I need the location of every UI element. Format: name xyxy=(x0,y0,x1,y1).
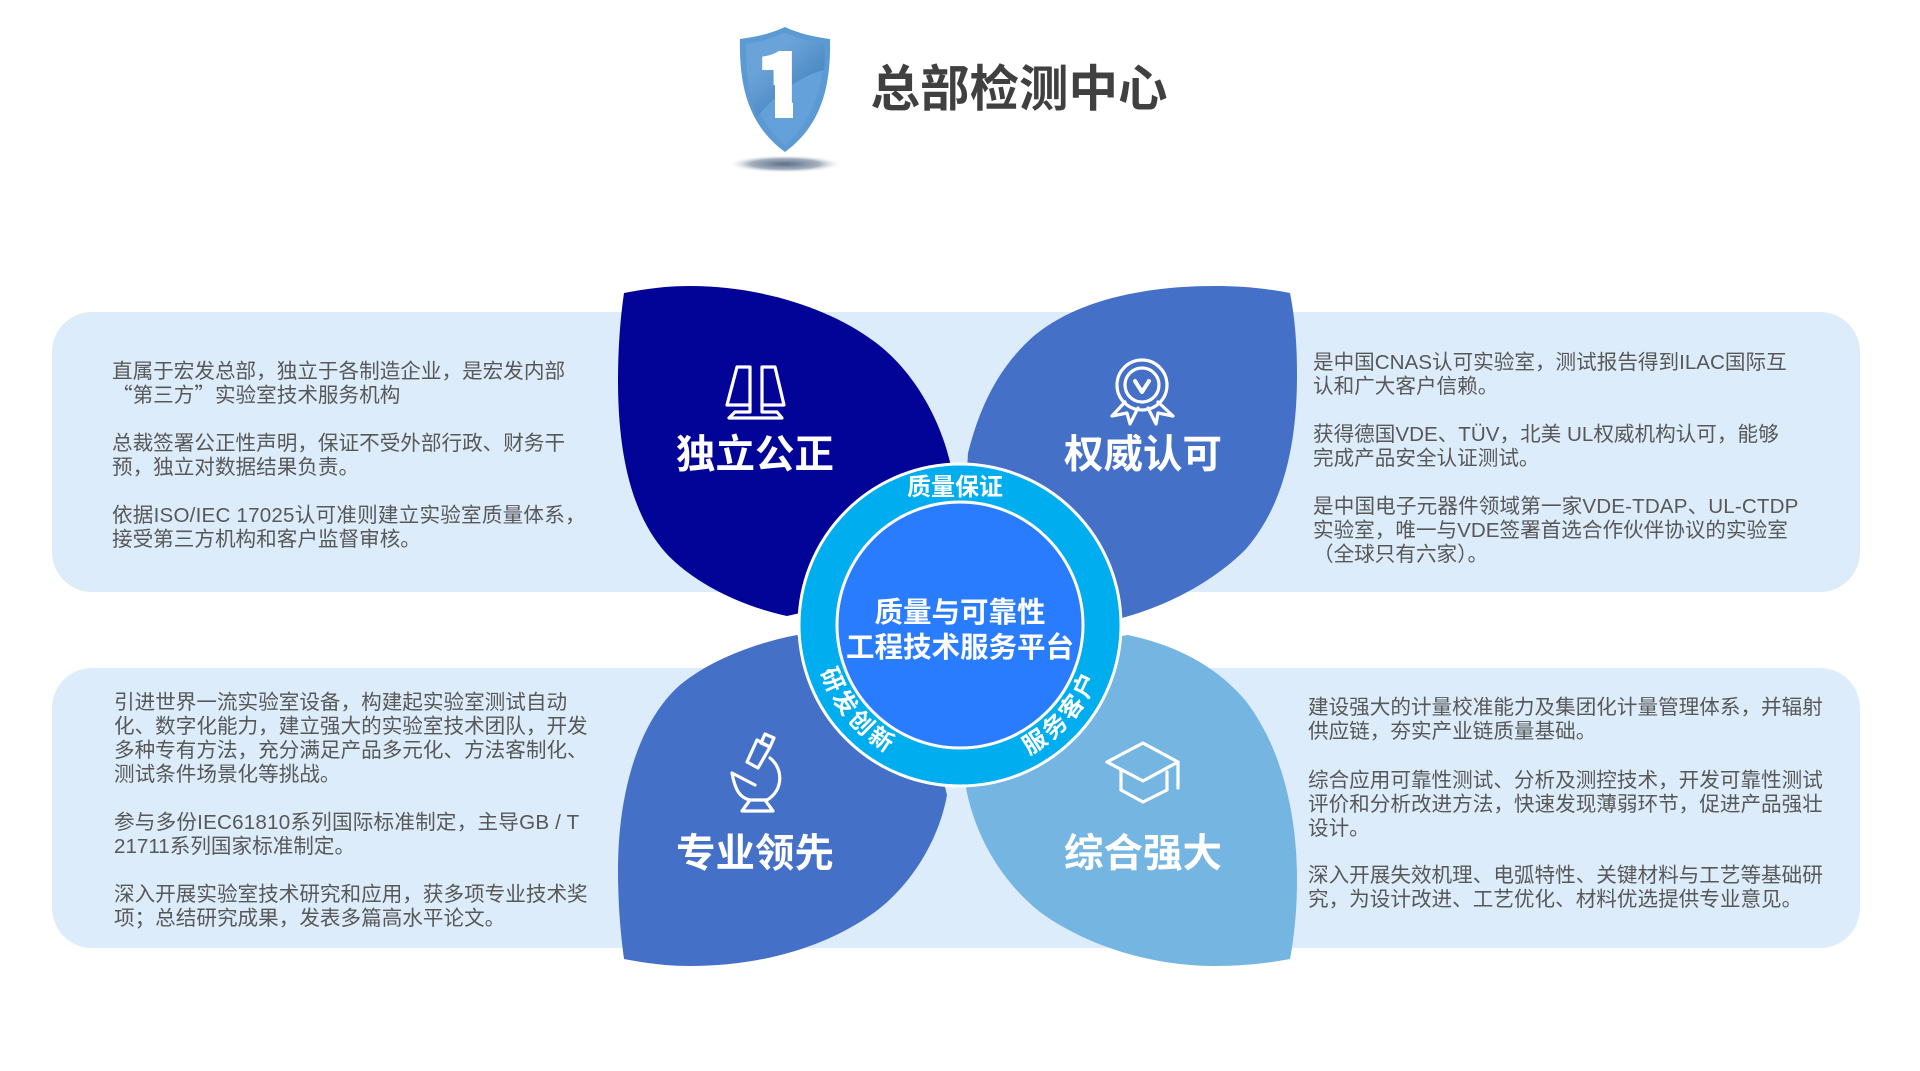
ring label: quality assurance: 质量保证 xyxy=(907,474,1003,501)
petal: comprehensive strength xyxy=(966,635,1297,966)
heading: independent and fair: 独立公正 xyxy=(676,433,834,477)
text block: top right: （全球只有六家）。 xyxy=(1313,543,1488,566)
text block: top left: 接受第三方机构和客户监督审核。 xyxy=(112,528,421,551)
text block: bottom right: 设计。 xyxy=(1308,817,1370,840)
petal: professional leadership xyxy=(618,635,947,966)
text block: bottom right xyxy=(1308,696,1823,911)
icon: scales xyxy=(727,367,784,418)
text block: bottom left: 多种专有方法，充分满足产品多元化、方法客制化、 xyxy=(114,739,588,762)
text block: bottom left: 测试条件场景化等挑战。 xyxy=(114,763,341,786)
panel: top background xyxy=(52,312,1860,592)
center title: 工程技术服务平台 xyxy=(846,631,1074,664)
heading: comprehensive strength: 综合强大 xyxy=(1064,832,1222,876)
text block: top right: 认和广大客户信赖。 xyxy=(1313,375,1498,398)
text block: bottom left: 项；总结研究成果，发表多篇高水平论文。 xyxy=(114,907,505,930)
petal: authoritative recognition xyxy=(967,286,1297,618)
text block: top right: 获得德国VDE、TÜV，北美 UL权威机构认可，能够 xyxy=(1313,423,1779,446)
ring xyxy=(799,464,1121,786)
text block: bottom right: 评价和分析改进方法，快速发现薄弱环节，促进产品强壮 xyxy=(1308,793,1823,816)
text block: top left: “第三方”实验室技术服务机构 xyxy=(112,378,400,408)
icon: microscope xyxy=(732,734,780,811)
text block: bottom left xyxy=(114,691,588,930)
icon: shield with number 1: 1 xyxy=(756,20,806,141)
title: 总部检测中心 xyxy=(870,62,1168,117)
text block: bottom left: 引进世界一流实验室设备，构建起实验室测试自动 xyxy=(114,691,567,714)
text block: bottom left: 化、数字化能力，建立强大的实验室技术团队，开发 xyxy=(114,715,588,738)
inner circle xyxy=(837,502,1083,748)
text block: top left: 依据ISO/IEC 17025认可准则建立实验室质量体系， xyxy=(112,504,586,527)
ring label: customer service: 服务客户 xyxy=(1020,674,1091,756)
center title xyxy=(846,597,1074,664)
text block: top right: 完成产品安全认证测试。 xyxy=(1313,447,1540,470)
text block: top right: 是中国CNAS认可实验室，测试报告得到ILAC国际互 xyxy=(1313,351,1787,374)
header xyxy=(727,20,1168,173)
text block: bottom right: 综合应用可靠性测试、分析及测控技术，开发可靠性测试 xyxy=(1308,769,1823,792)
heading: authoritative recognition: 权威认可 xyxy=(1064,433,1222,477)
text block: top left: 预，独立对数据结果负责。 xyxy=(112,456,359,479)
center hub xyxy=(798,462,1122,788)
text block: bottom right: 深入开展失效机理、电弧特性、关键材料与工艺等基础研 xyxy=(1308,864,1823,887)
text block: top left: 总裁签署公正性声明，保证不受外部行政、财务干 xyxy=(112,432,565,455)
text block: top right: 实验室，唯一与VDE签署首选合作伙伴协议的实验室 xyxy=(1313,519,1788,542)
text block: bottom right: 究，为设计改进、工艺优化、材料优选提供专业意见。 xyxy=(1308,888,1802,911)
text block: top left: 直属于宏发总部，独立于各制造企业，是宏发内部 xyxy=(112,360,565,383)
center title: 质量与可靠性 xyxy=(874,597,1046,629)
heading: professional leadership: 专业领先 xyxy=(676,832,834,876)
text block: bottom right: 建设强大的计量校准能力及集团化计量管理体系，并辐射 xyxy=(1308,696,1823,719)
icon: award ribbon xyxy=(1112,360,1173,424)
panel: bottom background xyxy=(52,668,1860,948)
text block: bottom left: 21711系列国家标准制定。 xyxy=(114,835,355,858)
petal: independent and fair xyxy=(618,286,950,616)
text block: bottom left: 参与多份IEC61810系列国际标准制定，主导GB / T xyxy=(114,811,580,834)
text block: top right: 是中国电子元器件领域第一家VDE-TDAP、UL-CTDP xyxy=(1313,495,1798,518)
text block: bottom left: 深入开展实验室技术研究和应用，获多项专业技术奖 xyxy=(114,883,588,906)
ring label: R&D innovation: 研发创新 xyxy=(820,665,896,753)
text block: bottom right: 供应链，夯实产业链质量基础。 xyxy=(1308,720,1596,743)
icon: shield with number 1 xyxy=(734,27,836,172)
icon: graduation cap xyxy=(1107,743,1178,802)
text block: top left xyxy=(112,360,586,551)
text block: top right xyxy=(1313,351,1798,566)
